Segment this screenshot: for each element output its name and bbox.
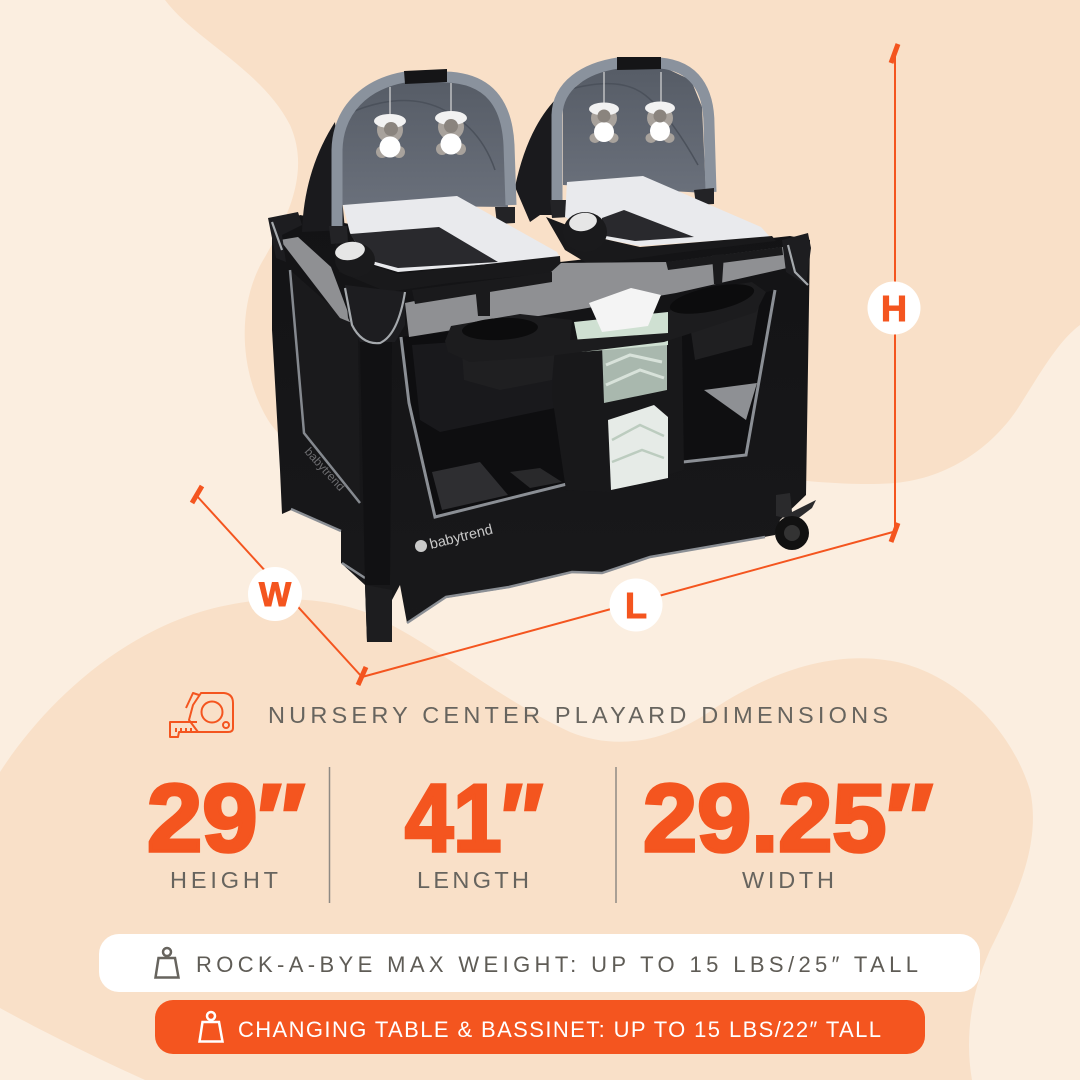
length value: 41″	[405, 765, 543, 872]
left hanging bag	[462, 348, 555, 390]
skirt trim	[291, 509, 765, 623]
length caption: LENGTH	[417, 867, 529, 893]
changing table text: CHANGING TABLE & BASSINET: UP TO 15 LBS/22″ TALL	[238, 1017, 881, 1042]
corner straps	[272, 222, 808, 343]
dimension lines	[192, 44, 898, 685]
arch hinges	[329, 188, 714, 244]
right canopy hood	[515, 95, 560, 222]
icon: tape measure	[170, 693, 233, 737]
width value: 29.25″	[643, 765, 933, 872]
left bassinet lining	[343, 196, 560, 272]
heather rail front	[405, 247, 787, 337]
height value: 29″	[147, 765, 305, 872]
height label: H	[881, 288, 907, 329]
arch straps	[404, 57, 661, 84]
crib body	[272, 215, 810, 642]
left canopy panel	[340, 78, 508, 207]
front left window	[401, 320, 567, 517]
brand logo: babytrend	[428, 522, 495, 553]
stat: length	[405, 765, 543, 893]
side logo: babytrend	[302, 445, 348, 494]
left toy: sheep 2	[435, 83, 467, 155]
rail corners	[268, 212, 811, 342]
width label: W	[259, 576, 292, 614]
left bassinet interior	[350, 227, 498, 268]
icon: weight	[156, 948, 178, 978]
changing table weight pill	[155, 1000, 925, 1054]
height label	[868, 282, 920, 334]
left canopy arch	[337, 77, 511, 227]
wipes tissue	[589, 288, 661, 332]
diapers pocket	[608, 405, 668, 490]
caster wheel	[775, 493, 816, 550]
rock-a-bye weight pill	[99, 934, 980, 992]
organizer	[552, 335, 684, 492]
icon: weight	[200, 1012, 222, 1042]
stat: height	[147, 765, 305, 893]
left canopy hood	[302, 122, 345, 232]
right canopy arch	[557, 63, 711, 208]
section title: NURSERY CENTER PLAYARD DIMENSIONS	[268, 702, 888, 728]
right toy: sheep 2	[645, 72, 675, 143]
end ticks	[192, 44, 898, 685]
left music box	[334, 240, 375, 277]
corner post	[360, 340, 392, 585]
length label: L	[625, 585, 647, 626]
rail connectors	[412, 247, 783, 316]
canopy seams	[345, 84, 698, 170]
width label	[248, 567, 302, 621]
right bassinet front	[546, 217, 776, 265]
width caption: WIDTH	[742, 867, 834, 893]
right bassinet lining	[565, 176, 770, 246]
wipes pack	[574, 312, 668, 352]
rock-a-bye text: ROCK-A-BYE MAX WEIGHT: UP TO 15 LBS/25″ TALL	[196, 952, 918, 977]
right canopy panel	[563, 66, 706, 193]
length label	[610, 578, 662, 632]
left leg	[365, 585, 392, 642]
height line	[894, 52, 896, 530]
height caption: HEIGHT	[170, 867, 278, 893]
right bassinet interior	[600, 210, 694, 241]
left bassinet front	[335, 243, 561, 292]
right toy: sheep	[589, 72, 619, 143]
length line	[362, 532, 893, 677]
stat: width	[643, 765, 933, 893]
width line	[196, 495, 362, 677]
right hanging bag	[690, 300, 760, 360]
product photo: playard	[268, 57, 816, 642]
changing tray	[445, 278, 766, 362]
right music box	[563, 211, 607, 252]
left toy: sheep	[374, 87, 406, 158]
front right window	[680, 290, 775, 462]
side mesh panel	[290, 270, 360, 503]
heather rail left	[280, 237, 352, 323]
wipes mesh pocket	[602, 335, 667, 403]
